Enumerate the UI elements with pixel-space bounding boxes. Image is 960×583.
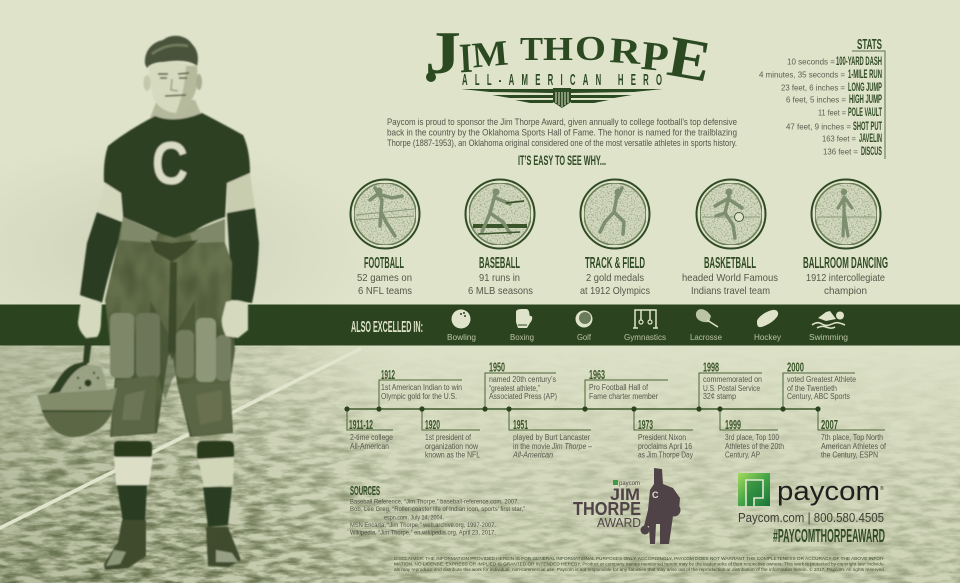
event: 1951: 1951 bbox=[513, 417, 528, 432]
panel: baseball: 6 MLB seasons bbox=[468, 285, 533, 297]
chart: timeline bbox=[344, 360, 887, 460]
event: 1999 bbox=[717, 406, 784, 460]
event: 1920: organization now bbox=[425, 442, 478, 451]
panel: stats: DISCUS bbox=[861, 146, 882, 158]
title: Jim Thorpe: R bbox=[608, 30, 643, 72]
logo: Paycom bbox=[738, 473, 884, 506]
dark socks bbox=[117, 485, 147, 522]
text block: sources: SOURCES bbox=[350, 483, 380, 498]
subtitle: All-American Hero: ALL-AMERICAN HERO bbox=[462, 71, 662, 89]
icon: winged shield bbox=[461, 88, 663, 108]
event: 1950: 1950 bbox=[489, 360, 505, 374]
intro paragraph bbox=[387, 117, 737, 148]
title: Jim Thorpe: I bbox=[458, 36, 474, 82]
panel: stats: 136 feet = bbox=[823, 146, 858, 156]
event: 1920: 1920 bbox=[425, 417, 440, 432]
event: 2000: voted Greatest Athlete bbox=[787, 375, 856, 384]
panel: football: 6 NFL teams bbox=[358, 285, 412, 297]
icon: bowling bbox=[447, 310, 476, 342]
icon: track medal bbox=[580, 180, 650, 248]
event: 1920: 1st president of bbox=[425, 433, 472, 442]
text block: sources: espn.com, July 14, 2004. bbox=[384, 514, 444, 522]
event: 1912: Olympic gold for the U.S. bbox=[381, 392, 457, 401]
panel: ballroom dancing: 1912 intercollegiate bbox=[806, 272, 885, 284]
panel: stats: LONG JUMP bbox=[848, 82, 882, 94]
panel: football bbox=[350, 180, 420, 297]
panel: basketball: headed World Famous bbox=[682, 272, 778, 284]
event: 1963: 1963 bbox=[589, 367, 605, 382]
jersey letter C: C bbox=[152, 130, 188, 197]
panel: football: FOOTBALL bbox=[364, 255, 404, 272]
panel: stats: 6 feet, 5 inches = bbox=[786, 94, 846, 104]
event: 1911-12: 2-time college bbox=[350, 433, 393, 442]
logo: Jim Thorpe Award: AWARD bbox=[597, 515, 641, 530]
icon: lacrosse: Lacrosse bbox=[690, 332, 722, 342]
arms skin bbox=[97, 182, 123, 222]
title: Jim Thorpe: J bbox=[425, 20, 461, 86]
panel: basketball: Indians travel team bbox=[691, 285, 770, 297]
event: 1951 bbox=[506, 406, 592, 460]
title: Jim Thorpe: O bbox=[575, 29, 606, 68]
icon: player silhouette: C bbox=[652, 490, 659, 500]
event: 1999: 1999 bbox=[725, 417, 741, 432]
event: 1973: 1973 bbox=[638, 417, 653, 432]
background bbox=[0, 193, 960, 583]
icon: boxing: Boxing bbox=[510, 332, 534, 342]
icon: gymnastics bbox=[624, 310, 666, 342]
panel: stats: 4 minutes, 35 seconds = bbox=[759, 70, 845, 80]
icon: hockey: Hockey bbox=[754, 332, 782, 342]
text block: disclaimer: DISCLAIMER: THE INFORMATION PROVIDED HEREIN IS FOR GENERAL INFORMATIONAL PURPOSES ONLY. ACCORDINGLY, PAYCOM DOES NOT WARRANT THE COMPLETENESS OR ACCURACY OF THE ABOVE INFOR- bbox=[394, 556, 885, 561]
thigh pads bbox=[110, 313, 134, 378]
title: Jim Thorpe: H bbox=[543, 31, 573, 68]
logo: Jim Thorpe Award: paycom bbox=[619, 481, 640, 487]
panel: ballroom dancing: champion bbox=[824, 285, 867, 297]
icon: golf: Golf bbox=[577, 332, 592, 342]
heading: stats: STATS bbox=[857, 36, 882, 53]
panel: stats: POLE VAULT bbox=[848, 107, 882, 119]
event: 1911-12 bbox=[344, 406, 393, 451]
green band bbox=[0, 304, 960, 346]
event: 1912: 1st American Indian to win bbox=[381, 383, 462, 392]
intro paragraph: back in the country by the Oklahoma Sports Hall of Fame. The honor is named for the trailblazing bbox=[387, 128, 737, 138]
event: 1973: proclaims April 16 bbox=[638, 442, 692, 451]
event: 1912 bbox=[376, 367, 462, 412]
event: 1973 bbox=[631, 406, 693, 460]
logo: Jim Thorpe Award bbox=[573, 468, 680, 544]
event: 1998: 32¢ stamp bbox=[703, 392, 736, 401]
event: 1911-12: All-American bbox=[350, 442, 389, 451]
title: Jim Thorpe: M bbox=[470, 32, 510, 75]
event: 1951: All-American bbox=[512, 450, 553, 460]
event: 1950: Associated Press (AP) bbox=[489, 392, 557, 401]
event: 1998: U.S. Postal Service bbox=[703, 384, 760, 393]
photo: Jim Thorpe figure bbox=[37, 36, 259, 570]
text: ALSO EXCELLED IN: bbox=[351, 319, 423, 336]
title: Jim Thorpe: T bbox=[520, 31, 543, 68]
icon: basketball medal bbox=[696, 180, 766, 248]
panel: football: 52 games on bbox=[357, 272, 412, 284]
panel: stats: 163 feet = bbox=[822, 134, 856, 144]
event: 1911-12: 1911-12 bbox=[349, 417, 373, 432]
event: 1998: commemorated on bbox=[703, 375, 762, 384]
panel: ballroom dancing bbox=[803, 180, 888, 297]
title: Jim Thorpe bbox=[425, 20, 716, 94]
icon: hockey bbox=[754, 310, 782, 342]
panel: basketball bbox=[682, 180, 778, 297]
event: 2007: 2007 bbox=[821, 417, 838, 432]
event: 2007: the Century, ESPN bbox=[821, 450, 878, 460]
icon: golf bbox=[576, 310, 592, 342]
event: 2000: Century, ABC Sports bbox=[787, 392, 850, 401]
title: Jim Thorpe: P bbox=[639, 32, 671, 80]
hands bbox=[78, 299, 102, 338]
event: 2000 bbox=[780, 360, 856, 412]
event: 2007: 7th place, Top North bbox=[821, 433, 883, 442]
panel: stats: JAVELIN bbox=[859, 133, 882, 145]
panel: stats: 11 feet = bbox=[818, 108, 846, 118]
icon: swimming: Swimming bbox=[809, 332, 848, 342]
helmet bbox=[83, 338, 92, 363]
text block: disclaimer: als may reproduce and distribute this work for individual, non-commercial use. Paycom is not responsible for any liabilities that may arise out of the reproduction or distribution of the information herein. © 2017, Paycom. All rights reserved. bbox=[394, 566, 885, 572]
jersey bbox=[104, 113, 250, 240]
panel: stats: 100-YARD DASH bbox=[836, 56, 882, 68]
icon: boxing bbox=[510, 309, 534, 342]
title: Jim Thorpe: E bbox=[663, 23, 716, 94]
text block: sources: MSN Encarta, “Jim Thorpe,” web.archive.org, 1997-2007. bbox=[350, 522, 496, 529]
event: 2000: of the Twentieth bbox=[787, 384, 837, 393]
panel: stats: 23 feet, 6 inches = bbox=[781, 82, 845, 92]
event: 2000: 2000 bbox=[787, 360, 804, 374]
event: 1963 bbox=[582, 367, 668, 412]
panel: track and field: 2 gold medals bbox=[586, 272, 644, 284]
knees shading bbox=[112, 375, 156, 436]
panel: basketball: BASKETBALL bbox=[704, 255, 756, 272]
event: 1950: named 20th century’s bbox=[489, 375, 556, 384]
event: 1973: President Nixon bbox=[638, 433, 686, 442]
icon: lacrosse bbox=[690, 309, 722, 342]
event: 1963: Fame charter member bbox=[589, 392, 658, 401]
neck and head bbox=[150, 100, 202, 124]
event: 1920: known as the NFL bbox=[425, 450, 480, 460]
intro paragraph: Paycom is proud to sponsor the Jim Thorpe Award, given annually to college football’s top defensive bbox=[387, 117, 737, 127]
panel: track and field: TRACK & FIELD bbox=[585, 255, 645, 272]
text block: disclaimer bbox=[394, 556, 885, 572]
event: 1999: Century, AP bbox=[725, 450, 760, 460]
event: 1912: 1912 bbox=[381, 367, 395, 382]
heading: it's easy to see why: IT’S EASY TO SEE WHY... bbox=[518, 152, 606, 168]
panel: stats bbox=[759, 36, 885, 159]
icon: baseball medal bbox=[466, 180, 534, 248]
event: 1951: in the movie Jim Thorpe – bbox=[513, 442, 592, 451]
panel: stats: HIGH JUMP bbox=[849, 94, 882, 106]
text block: sources bbox=[350, 483, 525, 536]
panel: track and field: at 1912 Olympics bbox=[580, 285, 650, 297]
panel: stats: 10 seconds = bbox=[787, 56, 835, 66]
text block: sources: Baseball Reference, “Jim Thorpe,” baseball-reference.com, 2007. bbox=[350, 498, 519, 506]
event: 1998: 1998 bbox=[703, 360, 719, 374]
event: 1950 bbox=[482, 360, 557, 412]
panel: stats: 47 feet, 9 inches = bbox=[786, 122, 851, 132]
contact line: Paycom.com | 800.580.4505 bbox=[738, 511, 884, 525]
logo: Paycom: ® bbox=[880, 485, 884, 492]
panel: baseball bbox=[466, 180, 534, 297]
pants bbox=[105, 217, 235, 437]
event: 1999: Athletes of the 20th bbox=[725, 442, 784, 451]
white socks bbox=[114, 457, 153, 485]
logo: Jim Thorpe Award: THORPE bbox=[573, 499, 641, 519]
text block: sources: Wikipedia, “Jim Thorpe,” en.wikipedia.org, April 23, 2017. bbox=[350, 530, 496, 536]
left sleeve bbox=[80, 212, 122, 303]
logo: Paycom: paycom bbox=[777, 476, 880, 506]
event: 2007 bbox=[815, 406, 887, 460]
panel: stats: SHOT PUT bbox=[853, 121, 882, 133]
panel: baseball: BASEBALL bbox=[479, 255, 520, 272]
event: 1998 bbox=[696, 360, 762, 412]
event: 1950: “greatest athlete,” bbox=[489, 384, 540, 393]
event: 1963: Pro Football Hall of bbox=[589, 383, 649, 392]
icon: dancing medal bbox=[812, 180, 880, 248]
event: 1920 bbox=[419, 406, 480, 460]
event: 1973: as Jim Thorpe Day bbox=[638, 450, 693, 460]
event: 2007: American Athletes of bbox=[821, 442, 887, 451]
panel: baseball: 91 runs in bbox=[479, 272, 520, 284]
text block: sources: Bob, Lee Greg, “Roller-coaster life of Indian icon, sports’ first star,” bbox=[350, 506, 525, 513]
panel: track and field bbox=[580, 180, 650, 297]
event: 1999: 3rd place, Top 100 bbox=[725, 433, 779, 442]
text block: disclaimer: MATION. NO LICENSE, EXPRESS OR IMPLIED IS GRANTED OR INTENDED HEREBY. Product or company names mentioned herein may be the trademarks of their respective owners. This work is protected by copyright law: Individu- bbox=[394, 562, 885, 566]
logo: Jim Thorpe Award: JIM bbox=[610, 485, 640, 504]
shoes bbox=[104, 520, 146, 570]
event: 1951: played by Burt Lancaster bbox=[513, 433, 590, 442]
icon: gymnastics: Gymnastics bbox=[624, 332, 666, 342]
right sleeve bbox=[227, 208, 259, 303]
intro paragraph: Thorpe (1887-1953), an Oklahoma original considered one of the most versatile athletes in sports history. bbox=[387, 138, 737, 148]
panel: stats: 1-MILE RUN bbox=[848, 69, 882, 81]
icon: bowling: Bowling bbox=[447, 332, 476, 342]
icon: football medal bbox=[350, 180, 420, 248]
cuffs bbox=[114, 441, 152, 458]
icon: swimming bbox=[809, 311, 848, 342]
